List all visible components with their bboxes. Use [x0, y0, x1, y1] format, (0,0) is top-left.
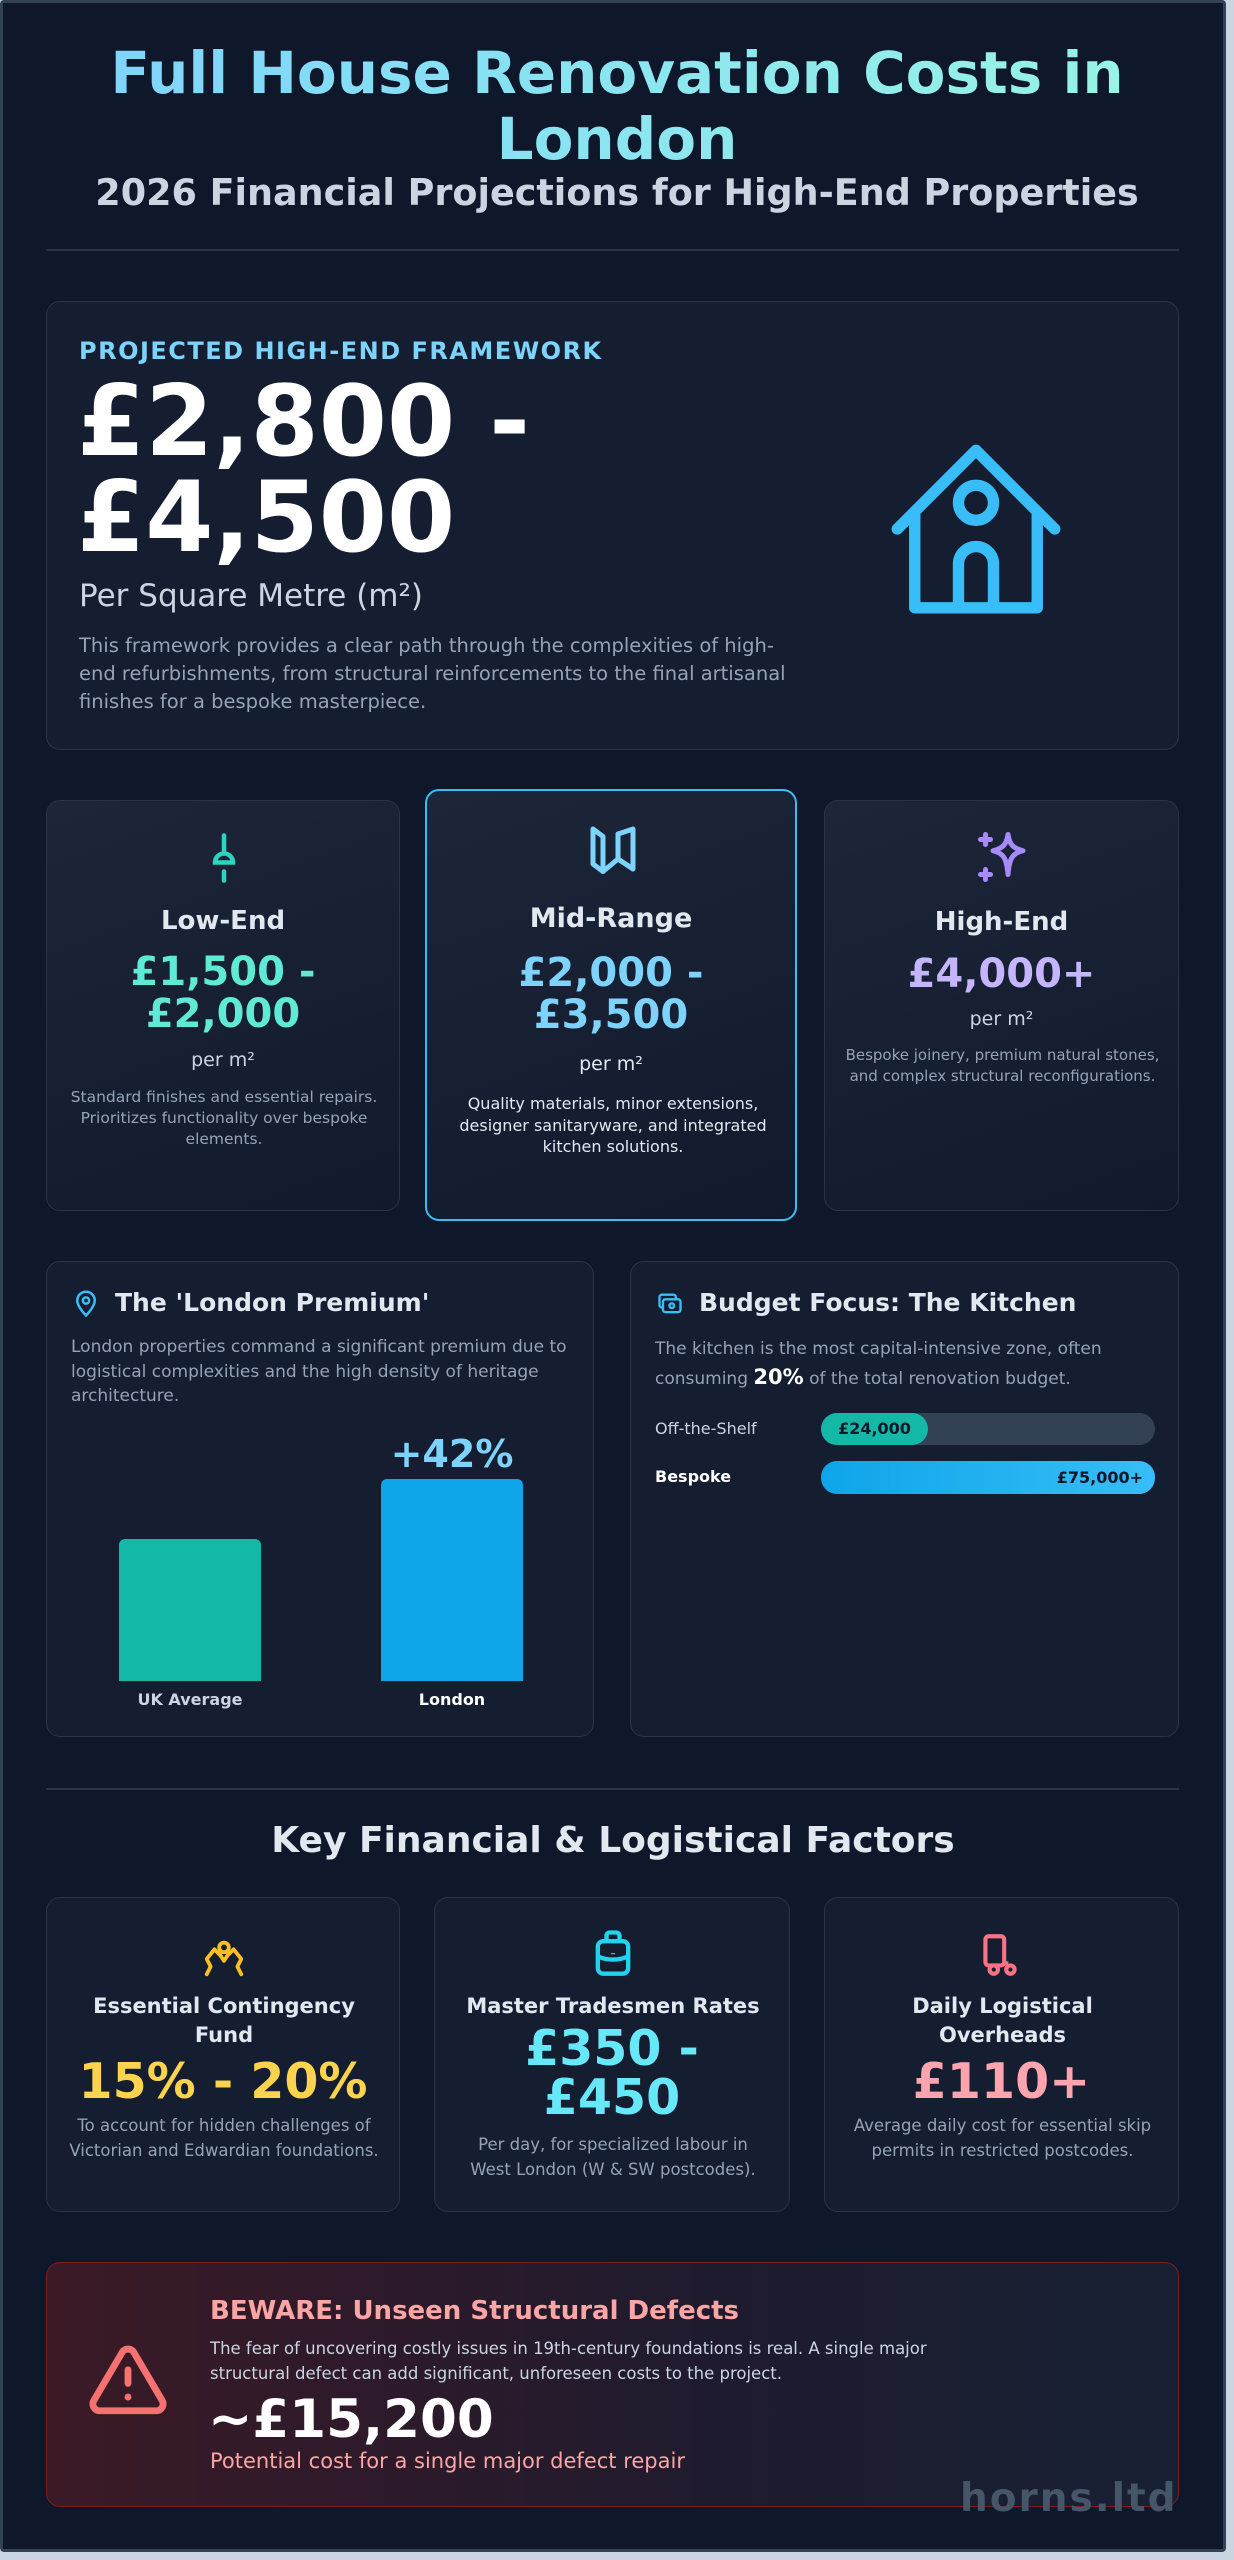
warning caption: Potential cost for a single major defect repair [210, 2449, 685, 2473]
callout: structural defects warning [46, 2262, 1179, 2507]
panel: contingency fund [46, 1897, 400, 2212]
subtitle: 2026 Financial Projections for High-End Properties [95, 171, 1139, 214]
callout: +42%: +42% [391, 1432, 513, 1476]
warning description: The fear of uncovering costly issues in 19th-century foundations is real. A single major structural defect can add significant, unforeseen costs to the project. [210, 2339, 927, 2382]
tier price: £2,000 - [519, 950, 703, 996]
hero description: This framework provides a clear path through the complexities of high-end refurbishments, from structural reinforcements to the final artisanal finishes for a bespoke masterpiece. [79, 634, 786, 713]
hero value: £4,500 [77, 461, 455, 575]
icon: sparkles [978, 832, 1026, 882]
factor description: Per day, for specialized labour in West London (W & SW postcodes). [470, 2135, 756, 2178]
tier unit: per m² [191, 1049, 255, 1071]
tier description: Bespoke joinery, premium natural stones, and complex structural reconfigurations. [846, 1046, 1159, 1084]
tier title: High-End [935, 907, 1068, 937]
hero value [77, 365, 530, 575]
bar: bespoke: Bespoke [655, 1467, 731, 1486]
panel heading: Budget Focus: The Kitchen [699, 1288, 1076, 1317]
label: London: London [419, 1690, 485, 1709]
icon: brush [212, 833, 236, 883]
panel: high-end tier [824, 800, 1179, 1211]
tier unit: per m² [970, 1008, 1033, 1030]
hero label: PROJECTED HIGH-END FRAMEWORK [79, 337, 603, 365]
factor value: £110+ [913, 2053, 1090, 2110]
factor title: Essential Contingency Fund [93, 1994, 355, 2047]
title [40, 40, 1194, 172]
tier unit: per m² [579, 1053, 643, 1075]
factor title: Daily Logistical Overheads [912, 1994, 1093, 2047]
section heading: Key Financial & Logistical Factors [271, 1820, 955, 1861]
tier price: £1,500 - [131, 949, 315, 995]
panel: london premium [46, 1261, 594, 1737]
bar: bespoke: £75,000+ [1057, 1468, 1143, 1487]
tier description: Standard finishes and essential repairs. Prioritizes functionality over bespoke elements. [71, 1088, 377, 1148]
tier title: Mid-Range [530, 903, 692, 934]
title: London [497, 105, 737, 173]
icon: briefcase [596, 1930, 630, 1976]
panel: logistical overheads [824, 1897, 1179, 2212]
panel: low-end tier [46, 800, 400, 1211]
icon: cash [658, 1294, 682, 1314]
tier title: Low-End [161, 906, 285, 936]
icon: map [590, 826, 636, 874]
label: UK average: UK Average [137, 1690, 243, 1709]
panel description: The kitchen is the most capital-intensive zone, often consuming 20% of the total renovation budget. [655, 1339, 1102, 1389]
bar: off-the-shelf: £24,000 [838, 1419, 911, 1438]
tier description: Quality materials, minor extensions, designer sanitaryware, and integrated kitchen solutions. [459, 1094, 767, 1156]
bar: bespoke [655, 1461, 1155, 1494]
icon: hands coin [204, 1940, 244, 1976]
hero unit: Per Square Metre (m²) [79, 578, 423, 614]
icon: location pin [76, 1290, 96, 1318]
bar chart [119, 1432, 523, 1709]
bar: London [381, 1479, 523, 1681]
factor value: £450 [544, 2069, 680, 2126]
factor description: To account for hidden challenges of Victorian and Edwardian foundations. [69, 2116, 379, 2160]
tier price: £2,000 [146, 991, 300, 1037]
warning value: ~£15,200 [208, 2389, 494, 2450]
bar: off-the-shelf: Off-the-Shelf [655, 1419, 757, 1438]
panel: kitchen budget [630, 1261, 1179, 1737]
panel: hero framework [46, 301, 1179, 750]
factor value: £350 - [525, 2020, 699, 2077]
factor description: Average daily cost for essential skip permits in restricted postcodes. [854, 2116, 1151, 2160]
panel description: London properties command a significant premium due to logistical complexities and the high density of heritage architecture. [71, 1337, 567, 1406]
hero value: £2,800 - [77, 365, 530, 479]
tier price: £3,500 [534, 992, 688, 1038]
icon: house [892, 444, 1060, 614]
panel heading: The 'London Premium' [115, 1288, 429, 1317]
bar: off-the-shelf [655, 1413, 1155, 1445]
tier price: £4,000+ [908, 951, 1095, 997]
tier price [131, 949, 315, 1037]
factor value [525, 2020, 699, 2126]
title: Full House Renovation Costs in [110, 39, 1124, 107]
icon: skip truck [983, 1934, 1017, 1976]
icon: warning triangle [89, 2346, 167, 2414]
panel: mid-range tier [425, 789, 797, 1221]
factor title: Master Tradesmen Rates [466, 1994, 760, 2018]
factor value: 15% - 20% [78, 2053, 368, 2110]
panel: tradesmen rates [434, 1897, 790, 2212]
watermark: horns.ltd [960, 2476, 1178, 2521]
tier price [519, 950, 703, 1038]
warning title: BEWARE: Unseen Structural Defects [210, 2296, 739, 2326]
bar: UK average [119, 1539, 261, 1681]
